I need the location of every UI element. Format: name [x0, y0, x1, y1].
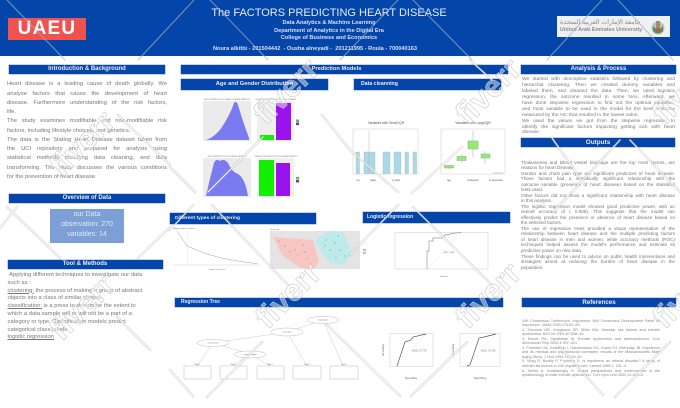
chart: variables with small IQR: [353, 121, 418, 182]
chart: logistic ROC curve: AUC: 0.908: [444, 251, 455, 254]
chart: gender distribution normal: [254, 155, 299, 197]
text: methods: which a data sample will or will not be a part of a: [8, 311, 132, 317]
chart: age and gender charts: [203, 98, 299, 197]
chart: ROC curve AUC 0.714: Sensitivity: [451, 343, 455, 356]
heading: Different types of clustering: [170, 213, 316, 224]
text: introduction: the UCI repository and prepared for analysis using: [7, 146, 167, 152]
text: methods: category or type. Classification models predict: [8, 319, 126, 325]
text: introduction: disease. Furthermore understanding of the risk factors,: [7, 100, 167, 106]
chart: elbow plot: Optimal number of clusters: [173, 227, 195, 230]
panel: references: [522, 298, 676, 377]
text: references: epidemiology of male erectile dysfunction. Curr Opin Urol 2002;12:493–6.: [522, 373, 644, 377]
chart: gender distribution normal: GENDER DISTRIBUTION OF NORMAL PATIENTS: [254, 155, 298, 158]
chart: decision tree: major_vessels: [208, 342, 219, 345]
text: outputs: population.: [521, 265, 543, 270]
chart: cluster plot: Cluster plot: [270, 228, 280, 231]
text: analysis: [522, 76, 675, 135]
watermark overlay: fiverr: [248, 255, 328, 335]
watermark overlay: fiverr: [42, 103, 122, 183]
text: introduction: for the prevention of heart disease.: [7, 174, 97, 180]
panel: age and gender distribution: [180, 78, 328, 197]
heading: Tool & Methods: [8, 260, 162, 269]
chart: variables with small IQR: sex: [356, 180, 361, 182]
text: analysis: disease.: [522, 130, 540, 135]
heading: Outputs: [521, 138, 675, 147]
text: references: dysfunction. BJU Int 2001;87:838–45.: [522, 332, 585, 336]
text: analysis: hierarchal clustering. Then we created dummy variables and: [522, 83, 675, 88]
chart: age distribution heart disease: [203, 98, 251, 141]
logo: UAEU: UAEU: [18, 18, 76, 39]
heading: Data cleanning: [354, 79, 501, 90]
heading: References: [522, 298, 676, 307]
authors: Noura alkitbi - 201504442 - Ousha alneyadi - 201211995 - Roula - 700040163: [213, 46, 417, 52]
text: analysis: We started with descriptive statistics followed by clustering and: [522, 77, 675, 82]
heading: Age and Gender Distribution: [181, 79, 328, 90]
chart: decision tree: chest_pain: [283, 331, 291, 334]
text: outputs: in this analysis.: [521, 198, 552, 203]
heading: Prediction Models: [181, 65, 508, 74]
text: analysis: We used the values we got from the stepwise regression to: [522, 119, 675, 124]
text: references: 4. Feldman HA, Goldstein I, Hatzichristou DG, Krane RJ, McKinlay JB. Impotence: [522, 346, 660, 350]
panel: regression tree: [174, 298, 504, 380]
chart: ROC curve AUC 0.714: [451, 334, 500, 380]
chart: ROC curve AUC 0.773: Specificity: [405, 376, 418, 380]
chart: variables with small IQR: st_slope: [392, 179, 401, 182]
text: references: 6. Nehra A, Kulaksizoglu H. Global perspectives and controversies in the: [522, 369, 660, 373]
chart: variables with small IQR: Variables with Small IQR: [368, 121, 405, 125]
text: references: NIH Consensus Conference. Impotence. NIH Consensus Development Panel on: [522, 319, 660, 323]
chart: ROC curve AUC 0.714: AUC: 0.714: [481, 348, 496, 352]
heading: Data cleanning: Data cleanning: [361, 81, 398, 87]
text: references: arterial risk factors in 440 impotent men. Lancet 1985;1: 181–4.: [522, 364, 627, 368]
text: introduction: transforming. The study discusses the various conditions: [7, 164, 167, 170]
subtitle lines: Department of Analytics in the Digital Era: [274, 28, 384, 34]
text: outputs: reasons for heart Disease.: [521, 165, 575, 170]
text: outputs: strategies aimed at reducing the burden of heart disease in the: [521, 259, 675, 264]
title: The FACTORS PREDICTING HEART DISEASE: [211, 7, 447, 19]
chart: decision tree: Node 7: [267, 364, 273, 366]
chart: decision tree: thalassemia: [318, 319, 328, 322]
callout: data summary: our Data: [74, 210, 100, 218]
chart: ROC curve AUC 0.773: Sensitivity: [381, 343, 385, 356]
heading: Different types of clustering: Different types of clustering: [175, 216, 240, 221]
text: analysis: labeled them, and cleaned the data. Then, we used logistics: [522, 89, 675, 94]
text: methods: clustering: the process of making a group of abstract: [8, 288, 142, 294]
text: methods: such as :: [8, 280, 31, 286]
chart: ROC curve AUC 0.773: AUC: 0.773: [412, 348, 427, 352]
text: outputs: tests used.: [521, 187, 543, 192]
text: methods: categorical class labels: [8, 327, 67, 333]
watermark overlay: fiverr: [448, 255, 528, 335]
callout: data summary: observation: 270: [61, 221, 113, 228]
chart: ROC curve AUC 0.714: Specificity: [474, 376, 487, 380]
chart: gender distribution heart disease: [256, 98, 299, 141]
heading: Overview of Data: [9, 194, 165, 203]
heading: Analysis & Process: [521, 65, 676, 74]
heading: Analysis & Process: Analysis & Process: [571, 66, 626, 72]
logo: United Arab Emirates University: [557, 16, 670, 37]
text: methods: objects into a class of similar objects.: [8, 295, 103, 301]
text: outputs: These factors had a statistically significant relationship with the: [521, 176, 675, 181]
text: analysis: have done stepwise regression to find out the optimal variables,: [522, 101, 675, 106]
text: references: Aging Study. J Urol 1994;151:54–61.: [522, 355, 583, 359]
heading: Regression Tree: Regression Tree: [181, 299, 220, 305]
watermark overlay: fiverr: [42, 267, 122, 347]
watermark overlay: fiverr: [246, 51, 326, 131]
chart: cluster plot: [270, 228, 366, 269]
heading: Prediction Models: Prediction Models: [312, 66, 361, 72]
text: introduction: [7, 81, 167, 180]
panel: data cleaning: [352, 78, 506, 182]
watermark overlay: fiverr: [448, 51, 528, 131]
text: introduction: The data is the Statlog Heart Disease dataset taken from: [7, 137, 167, 143]
text: introduction: statistical methods including data cleaning, and data: [7, 155, 167, 161]
chart: elbow plot: Number of clusters k: [209, 268, 225, 271]
heading: Age and Gender Distribution: Age and Gender Distribution: [216, 81, 293, 87]
text: references: 5. Virag R, Bouilly P, Frydman D. Is impotence an arterial disorder? A study of: [522, 359, 660, 363]
text: outputs: Thalassemia and Blood vessel blockage are the top most factors, are: [521, 160, 675, 164]
text: analysis: and most suitable to be used in the model for the best accuracy: [522, 107, 675, 112]
heading: Overview of Data: Overview of Data: [63, 195, 111, 201]
panel: analysis and process: [520, 64, 676, 135]
heading: Introduction & Background: Introduction & Background: [48, 66, 126, 72]
heading: Regression Tree: [175, 298, 503, 307]
panel: tools and methods: [8, 260, 164, 340]
chart: age distribution heart disease: AGE DISTRIBUTION OF HEART DISEASE PATIENTS: [204, 98, 251, 101]
text: outputs: Other factors did not show a significant relationship with heart disease: [521, 193, 675, 198]
text: introduction: The study examines modifiable and non-modifiable risk: [7, 118, 167, 124]
chart: decision tree: Node 4: [194, 364, 200, 366]
text: analysis: identify the significant factors impacting getting sick with heart: [522, 124, 675, 130]
logo: United Arab Emirates University: United Arab Emirates University: [560, 27, 642, 33]
text: analysis: regression, the outcome resulted in some NAs. Afterward, we: [522, 95, 675, 100]
text: outputs: relationship between heart disease and the multiple predicting factors: [521, 231, 675, 236]
chart: decision tree: exercise_angina: [244, 353, 256, 356]
panel: introduction: [7, 64, 167, 180]
text: references: and its medical and psychosocial correlates: results of the Massachusetts Male: [522, 350, 660, 354]
text: methods: [8, 272, 142, 340]
text: outputs: effectively predict the presence or absence of heart disease based on: [521, 215, 675, 220]
chart: variables with large IQR: st_depression: [489, 179, 504, 182]
text: introduction: factors, including lifestyle choices, and genetics.: [7, 128, 130, 134]
text: outputs: The logistic regression model showed good predictive power, with an: [521, 204, 675, 209]
chart: decision tree: Node 8: [304, 364, 310, 366]
panel: overview of data: [8, 194, 166, 243]
text: outputs: predictive power on new data.: [521, 248, 582, 253]
text: introduction: analyse factors that cause the development of heart: [7, 91, 167, 97]
chart: variables with large IQR: [441, 121, 505, 182]
chart: boxplots: [352, 121, 506, 182]
heading: References: References: [582, 299, 616, 306]
text: methods: Applying different techniques to investigate our data: [9, 272, 142, 278]
panel: different types of clustering: [170, 212, 366, 271]
heading: Logistic regression: Logistic regression: [367, 214, 413, 220]
chart: variables with large IQR: Variables with LargeIQR: [455, 121, 491, 125]
text: outputs: of heart disease in men and women, while accuracy methods (ROC): [521, 237, 675, 242]
text: outputs: techniques helped assess the model's performance and estimate its: [521, 242, 675, 247]
text: outputs: overall accuracy of ( 0.908). This suggests that the model can: [521, 209, 675, 214]
text: references: 3. Kloner RA, Speakman M. Erectile dysfunction and atherosclerosis. Curr: [522, 337, 660, 341]
header banner: [0, 0, 680, 56]
chart: decision tree: [184, 316, 358, 379]
chart: clustering plots: [173, 227, 366, 271]
subtitle lines: [274, 20, 384, 41]
chart: age distribution normal: AGE DISTRIBUTION OF NORMAL PATIENTS: [207, 155, 247, 158]
logo: United Arab Emirates University: جامعة الإمارات العربية المتحدة: [560, 19, 640, 26]
heading: Outputs: Outputs: [586, 139, 610, 146]
chart: logistic ROC curve: [394, 232, 488, 277]
text: outputs: Gender and chest pain type are significant predictors of heart disease.: [521, 171, 675, 176]
chart: decision tree: Node 6: [230, 364, 236, 366]
text: outputs: These findings can be used to advice on public health interventions and: [521, 254, 675, 259]
panel: logistic regression: [362, 212, 510, 277]
text: references: [522, 319, 660, 377]
chart: variables with large IQR: age: [447, 180, 452, 182]
chart: elbow plot: [173, 227, 260, 271]
text: methods: classification: is a press to determine the extent to: [8, 303, 136, 309]
chart: variables with large IQR: cholesterol: [467, 179, 479, 182]
text: methods: logistic regression: [8, 334, 54, 340]
heading: Tool & Methods: Tool & Methods: [63, 261, 107, 267]
panel: outputs: [520, 138, 676, 270]
text: references: Impotence. JAMA 1993;270:83–90.: [522, 323, 581, 327]
chart: variables with small IQR: target: [370, 179, 376, 182]
callout: data summary: [50, 209, 124, 243]
chart: gender distribution heart disease: GENDER DISTRIBUTION OF HEART DISEASE: [256, 98, 297, 101]
chart: decision tree: Node 9: [341, 364, 347, 366]
chart: ROC curve AUC 0.773: [381, 334, 433, 380]
text: outputs: the selected factors.: [521, 220, 562, 225]
text: introduction: life.: [7, 109, 16, 115]
subtitle lines: College of Business and Economics: [281, 35, 377, 41]
chart: regression tree and ROC curves: [184, 316, 500, 380]
subtitle lines: Data Analytics & Machine Learning: [282, 20, 376, 26]
text: references: 2. Solomon ME, Kenghane SR, Miller MA. Vascular risk factors and erectile: [522, 328, 660, 332]
text: analysis: measured by the AIC that resulted in the lowest value.: [522, 113, 639, 118]
heading: Logistic regression: [363, 212, 510, 223]
text: outputs: [521, 160, 675, 270]
callout: data summary: variables: 14: [67, 231, 107, 238]
text: outputs: outcome variable (presence of heart disease) based on the statistical: [521, 182, 675, 187]
text: outputs: The use of regression trees provided a visual representation of the: [521, 226, 675, 231]
heading: Introduction & Background: [9, 65, 165, 74]
text: introduction: Heart disease is a leading cause of death globally. We: [7, 81, 167, 87]
text: references: Atheroscler Rep 2002;4:397–401.: [522, 341, 578, 345]
chart: age distribution normal: [203, 155, 251, 197]
